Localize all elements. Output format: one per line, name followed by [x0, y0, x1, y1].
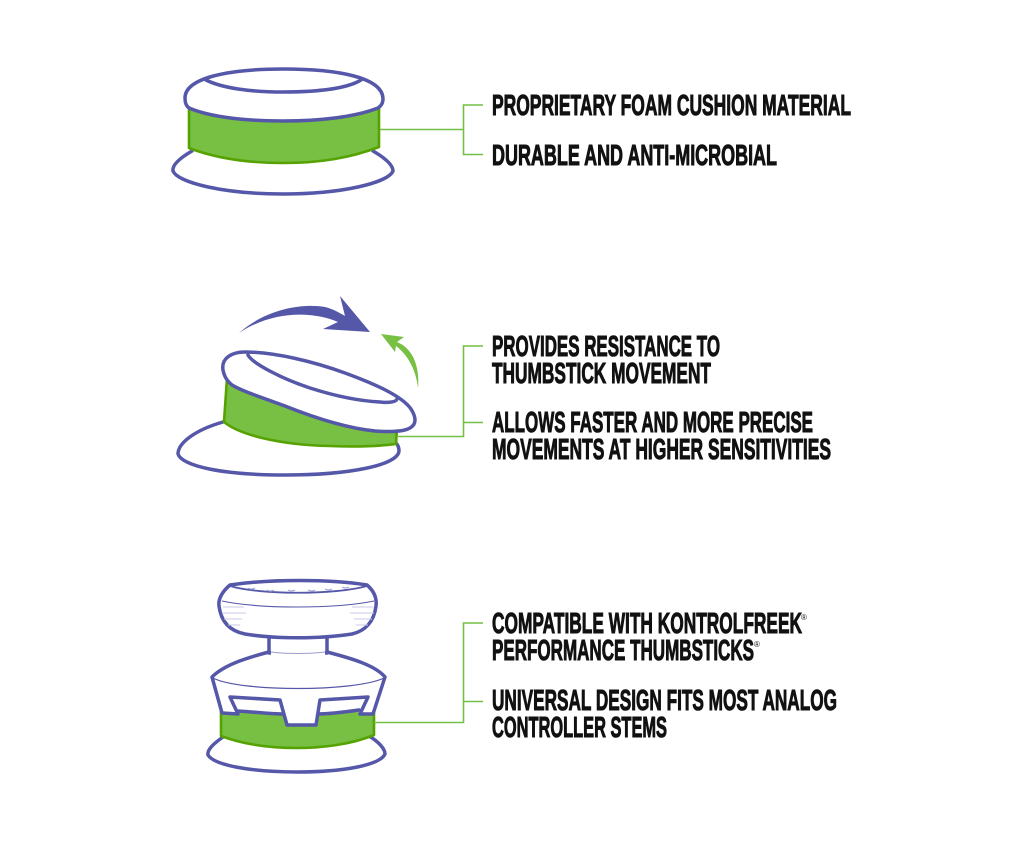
- connector: second panel bracket: [397, 346, 483, 436]
- text: controller stems: CONTROLLER STEMS: [492, 712, 667, 744]
- text: durable and anti-microbial: DURABLE AND ANTI-MICROBIAL: [492, 140, 777, 172]
- icon: tilted thumbstick with foam ring: [178, 352, 415, 475]
- text: thumbstick movement: THUMBSTICK MOVEMENT: [492, 358, 711, 390]
- arrow: green return arrow: [381, 334, 418, 388]
- connector: third panel bracket: [374, 623, 483, 722]
- text: provides resistance: PROVIDES RESISTANCE TO: [492, 331, 720, 363]
- text: compatible with kontrolfreek: [492, 608, 807, 640]
- text: performance thumbsticks: [492, 635, 760, 667]
- icon: foam ring on thumbstick: [173, 69, 393, 194]
- text: performance thumbsticks: ®: [754, 640, 760, 649]
- connector: first panel bracket: [380, 105, 483, 154]
- icon: thumbstick with foam ring attached: [208, 580, 385, 772]
- text: compatible with kontrolfreek: COMPATIBLE WITH KONTROLFREEK: [492, 608, 802, 640]
- text: compatible with kontrolfreek: ®: [801, 613, 807, 622]
- arrow: purple rotation arrow: [239, 296, 370, 333]
- text: performance thumbsticks: PERFORMANCE THUMBSTICKS: [492, 635, 754, 667]
- text: allows faster: ALLOWS FASTER AND MORE PRECISE: [492, 407, 813, 439]
